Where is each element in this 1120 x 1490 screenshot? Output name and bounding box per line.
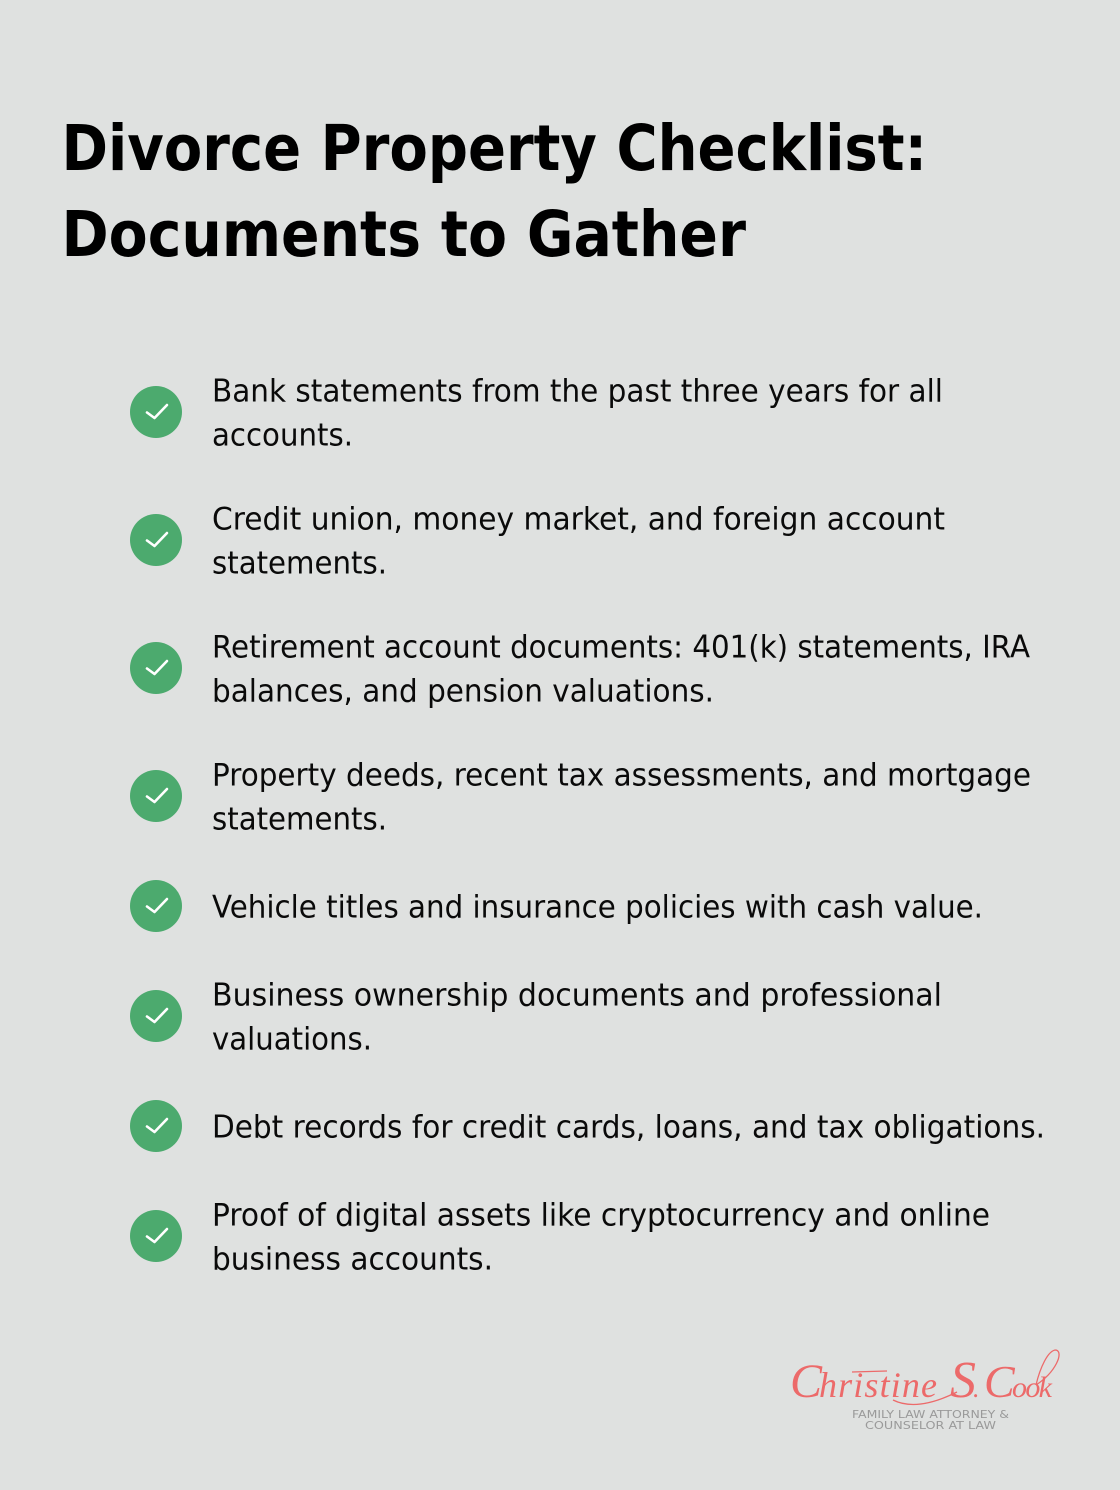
title: Documents to Gather bbox=[62, 198, 746, 271]
item: debt records bbox=[130, 1100, 1045, 1152]
item: business documents: Business ownership documents and professional bbox=[212, 978, 942, 1014]
logo: Christine S. Cook bbox=[790, 1350, 1059, 1432]
logo: Christine S. Cook: ook bbox=[1012, 1371, 1053, 1404]
item: retirement documents bbox=[130, 630, 1030, 710]
item: credit union statements: statements. bbox=[212, 546, 387, 582]
item: credit union statements bbox=[130, 502, 945, 582]
item: credit union statements: Credit union, money market, and foreign account bbox=[212, 502, 945, 538]
logo: Christine S. Cook: COUNSELOR AT LAW bbox=[865, 1419, 996, 1432]
item: debt records: Debt records for credit cards, loans, and tax obligations. bbox=[212, 1110, 1045, 1146]
item: bank statements: Bank statements from the past three years for all bbox=[212, 374, 943, 410]
item: bank statements bbox=[130, 374, 943, 454]
logo: Christine S. Cook: hristine bbox=[819, 1365, 937, 1405]
logo: Christine S. Cook: S bbox=[950, 1352, 976, 1409]
item: retirement documents: balances, and pension valuations. bbox=[212, 674, 714, 710]
logo: Christine S. Cook: C bbox=[984, 1356, 1016, 1407]
item: digital assets bbox=[130, 1198, 990, 1278]
checklist bbox=[130, 374, 1045, 1278]
logo: Christine S. Cook: FAMILY LAW ATTORNEY & bbox=[852, 1408, 1009, 1421]
item: business documents bbox=[130, 978, 942, 1058]
item: property deeds bbox=[130, 758, 1031, 838]
item: digital assets: business accounts. bbox=[212, 1242, 493, 1278]
item: digital assets: Proof of digital assets like cryptocurrency and online bbox=[212, 1198, 990, 1234]
item: property deeds: Property deeds, recent tax assessments, and mortgage bbox=[212, 758, 1031, 794]
logo: Christine S. Cook: . bbox=[973, 1374, 980, 1403]
item: retirement documents: Retirement account documents: 401(k) statements, IRA bbox=[212, 630, 1030, 666]
item: bank statements: accounts. bbox=[212, 418, 353, 454]
item: vehicle titles bbox=[130, 880, 983, 932]
item: property deeds: statements. bbox=[212, 802, 387, 838]
item: vehicle titles: Vehicle titles and insurance policies with cash value. bbox=[212, 890, 983, 926]
item: business documents: valuations. bbox=[212, 1022, 372, 1058]
title bbox=[62, 112, 927, 271]
logo: Christine S. Cook: C bbox=[790, 1355, 823, 1408]
title: Divorce Property Checklist: bbox=[62, 112, 927, 185]
